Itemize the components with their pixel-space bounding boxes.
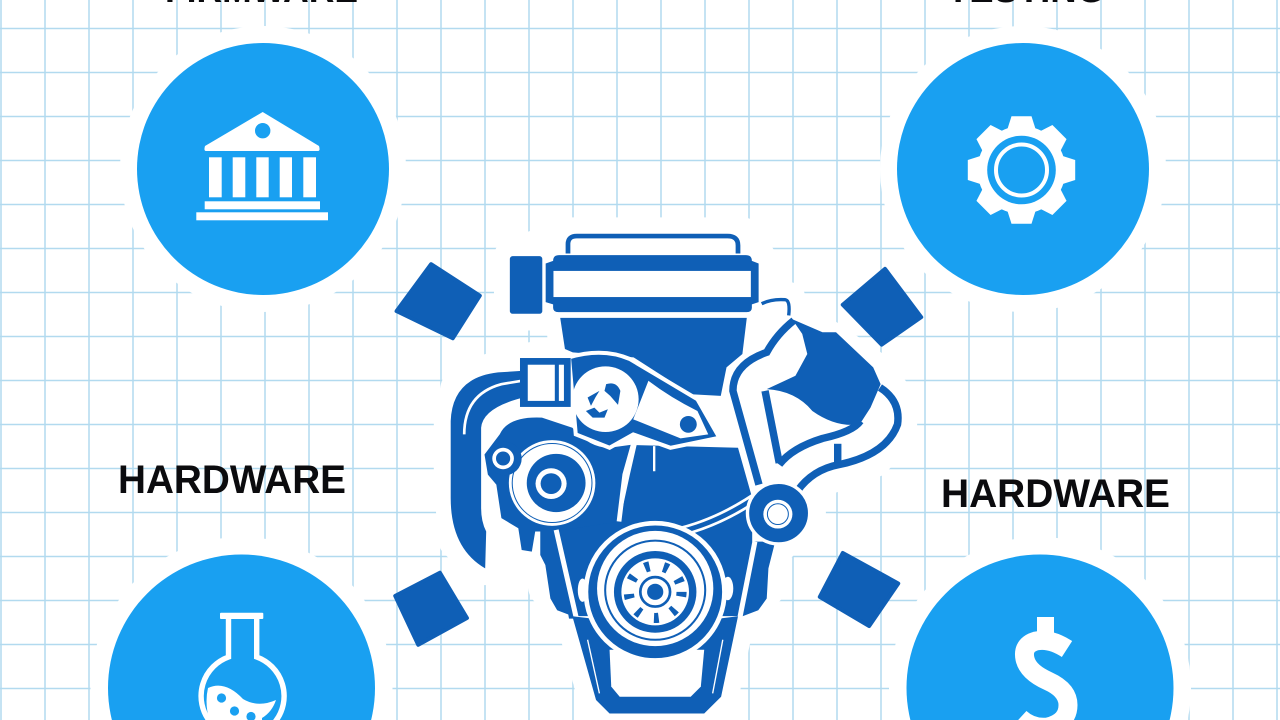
heading: hardware right: HARDWARE [941, 472, 1170, 516]
throttle arm [569, 353, 719, 448]
engine white halo [451, 234, 900, 716]
icon: dollar in circle [906, 554, 1174, 720]
square: top right [843, 269, 921, 345]
air filter [510, 236, 759, 396]
idler pulley and belt [674, 482, 810, 544]
right manifold [733, 300, 898, 491]
engine illustration with floating squares [395, 234, 921, 716]
crank pulley [578, 523, 733, 661]
engine block [484, 418, 775, 619]
icon: bank in circle [137, 43, 389, 295]
square: bottom right [820, 553, 898, 626]
square: bottom left [395, 573, 467, 645]
throttle box [520, 358, 571, 407]
sump [572, 616, 738, 713]
heading: hardware left: HARDWARE [118, 458, 346, 502]
left pulley [488, 440, 595, 526]
left hose [451, 371, 523, 568]
square: top left [397, 264, 480, 338]
icon: flask in circle [108, 554, 375, 720]
icon: gear in circle [897, 43, 1149, 295]
